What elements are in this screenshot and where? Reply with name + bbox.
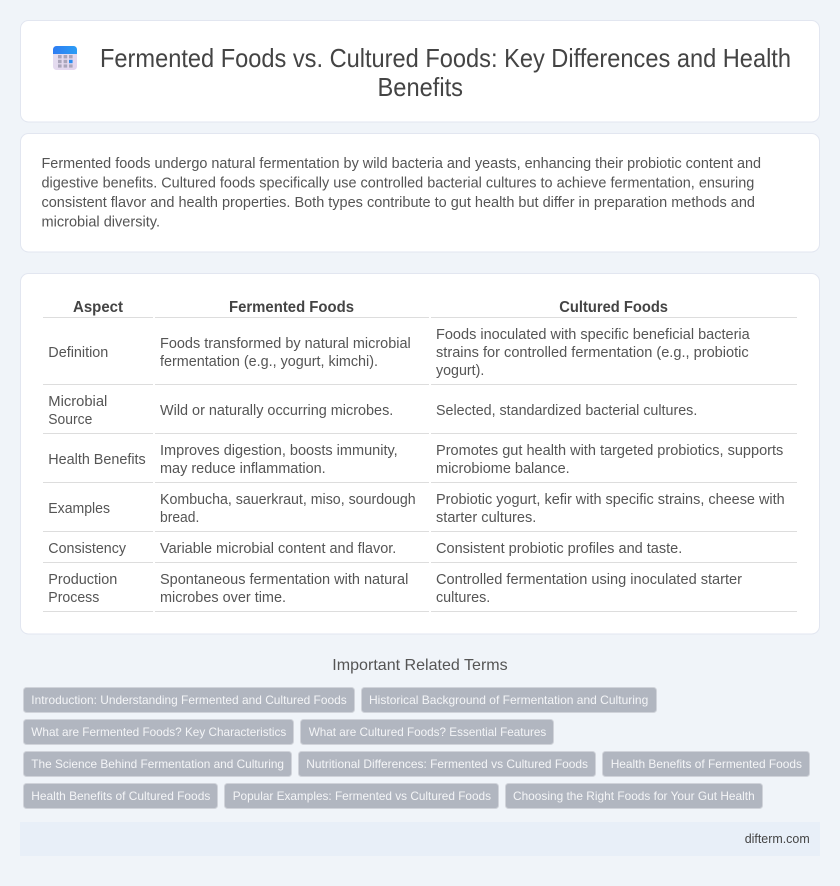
- table row: definition: strains for controlled fermentation (e.g., probiotic: [436, 345, 749, 361]
- footer: difterm.com: [745, 831, 810, 846]
- tag: Historical Background of Fermentation and Culturing: [369, 693, 648, 707]
- table row: microbial source: Source: [48, 412, 92, 428]
- table row: microbial source: [43, 394, 797, 434]
- table header row: Aspect: [73, 299, 124, 316]
- table row: microbial source: Wild or naturally occurring microbes.: [160, 403, 393, 419]
- table header row: [43, 299, 797, 318]
- title: Benefits: [378, 74, 463, 102]
- table row: health benefits: [43, 443, 797, 483]
- panel: introduction paragraph: [20, 134, 820, 252]
- table row: production process: Production: [48, 572, 117, 588]
- tag: Health Benefits of Fermented Foods: [611, 757, 802, 771]
- table row: health benefits: may reduce inflammation.: [160, 461, 326, 477]
- table row: health benefits: microbiome balance.: [436, 461, 570, 477]
- tag: [298, 752, 596, 776]
- tag: [24, 784, 218, 808]
- table row: health benefits: Promotes gut health with targeted probiotics, supports: [436, 443, 783, 459]
- panel: comparison table: [20, 274, 820, 634]
- tag: [300, 720, 554, 744]
- tag: [602, 752, 810, 776]
- title: Fermented Foods vs. Cultured Foods: Key Differences and Health: [100, 45, 791, 73]
- tag: What are Cultured Foods? Essential Features: [309, 725, 546, 739]
- table row: production process: Controlled fermentation using inoculated starter: [436, 572, 742, 588]
- table row: definition: yogurt).: [436, 363, 484, 379]
- tag: [24, 752, 292, 776]
- tag: Health Benefits of Cultured Foods: [31, 789, 210, 803]
- footer: [20, 822, 820, 856]
- text block: introduction: consistent flavor and health properties. Both types contribute to gut health but differ in preparation methods and: [42, 195, 755, 211]
- table row: health benefits: Improves digestion, boosts immunity,: [160, 443, 398, 459]
- tag: Introduction: Understanding Fermented and Cultured Foods: [31, 693, 347, 707]
- tag: The Science Behind Fermentation and Culturing: [31, 757, 284, 771]
- table row: consistency: Consistent probiotic profiles and taste.: [436, 541, 682, 557]
- tag: [506, 784, 762, 808]
- table row: definition: [43, 327, 797, 385]
- table row: examples: Examples: [48, 501, 110, 517]
- table row: definition: Foods inoculated with specific beneficial bacteria: [436, 327, 750, 343]
- tag: Popular Examples: Fermented vs Cultured Foods: [233, 789, 491, 803]
- table row: examples: bread.: [160, 510, 199, 526]
- table row: microbial source: Selected, standardized bacterial cultures.: [436, 403, 697, 419]
- title: [100, 45, 791, 102]
- tag: Choosing the Right Foods for Your Gut Health: [513, 789, 755, 803]
- table row: definition: Definition: [48, 345, 108, 361]
- table row: consistency: [43, 541, 797, 563]
- table row: definition: Foods transformed by natural microbial: [160, 336, 411, 352]
- table row: examples: starter cultures.: [436, 510, 536, 526]
- tag: [24, 720, 294, 744]
- panel: title header: [20, 20, 820, 122]
- icon: calendar: [53, 46, 77, 70]
- table row: production process: [43, 572, 797, 612]
- table row: examples: [43, 492, 797, 532]
- table row: production process: cultures.: [436, 590, 490, 606]
- table row: consistency: Variable microbial content and flavor.: [160, 541, 396, 557]
- table row: examples: Kombucha, sauerkraut, miso, sourdough: [160, 492, 416, 508]
- tag: [224, 784, 498, 808]
- text block: introduction: microbial diversity.: [42, 214, 160, 230]
- tag: Nutritional Differences: Fermented vs Cultured Foods: [306, 757, 588, 771]
- table row: production process: Process: [48, 590, 99, 606]
- table row: examples: Probiotic yogurt, kefir with specific strains, cheese with: [436, 492, 785, 508]
- table header row: Cultured Foods: [559, 299, 668, 316]
- table header row: Fermented Foods: [229, 299, 354, 316]
- table row: production process: Spontaneous fermentation with natural: [160, 572, 408, 588]
- table row: definition: fermentation (e.g., yogurt, kimchi).: [160, 354, 378, 370]
- table row: microbial source: Microbial: [48, 394, 107, 410]
- panel: related term tags: [24, 688, 810, 808]
- tag: [362, 688, 656, 712]
- text block: introduction: [42, 156, 761, 230]
- tag: What are Fermented Foods? Key Characteristics: [31, 725, 286, 739]
- table row: production process: microbes over time.: [160, 590, 286, 606]
- table row: health benefits: Health Benefits: [48, 452, 146, 468]
- tag: [24, 688, 354, 712]
- table row: consistency: Consistency: [48, 541, 127, 557]
- text block: introduction: Fermented foods undergo natural fermentation by wild bacteria and yeasts, enhancing their probiotic content and: [42, 156, 761, 172]
- heading: important related terms: Important Related Terms: [332, 657, 508, 674]
- text block: introduction: digestive benefits. Cultured foods specifically use controlled bacterial cultures to achieve fermentation, ensuring: [42, 176, 754, 192]
